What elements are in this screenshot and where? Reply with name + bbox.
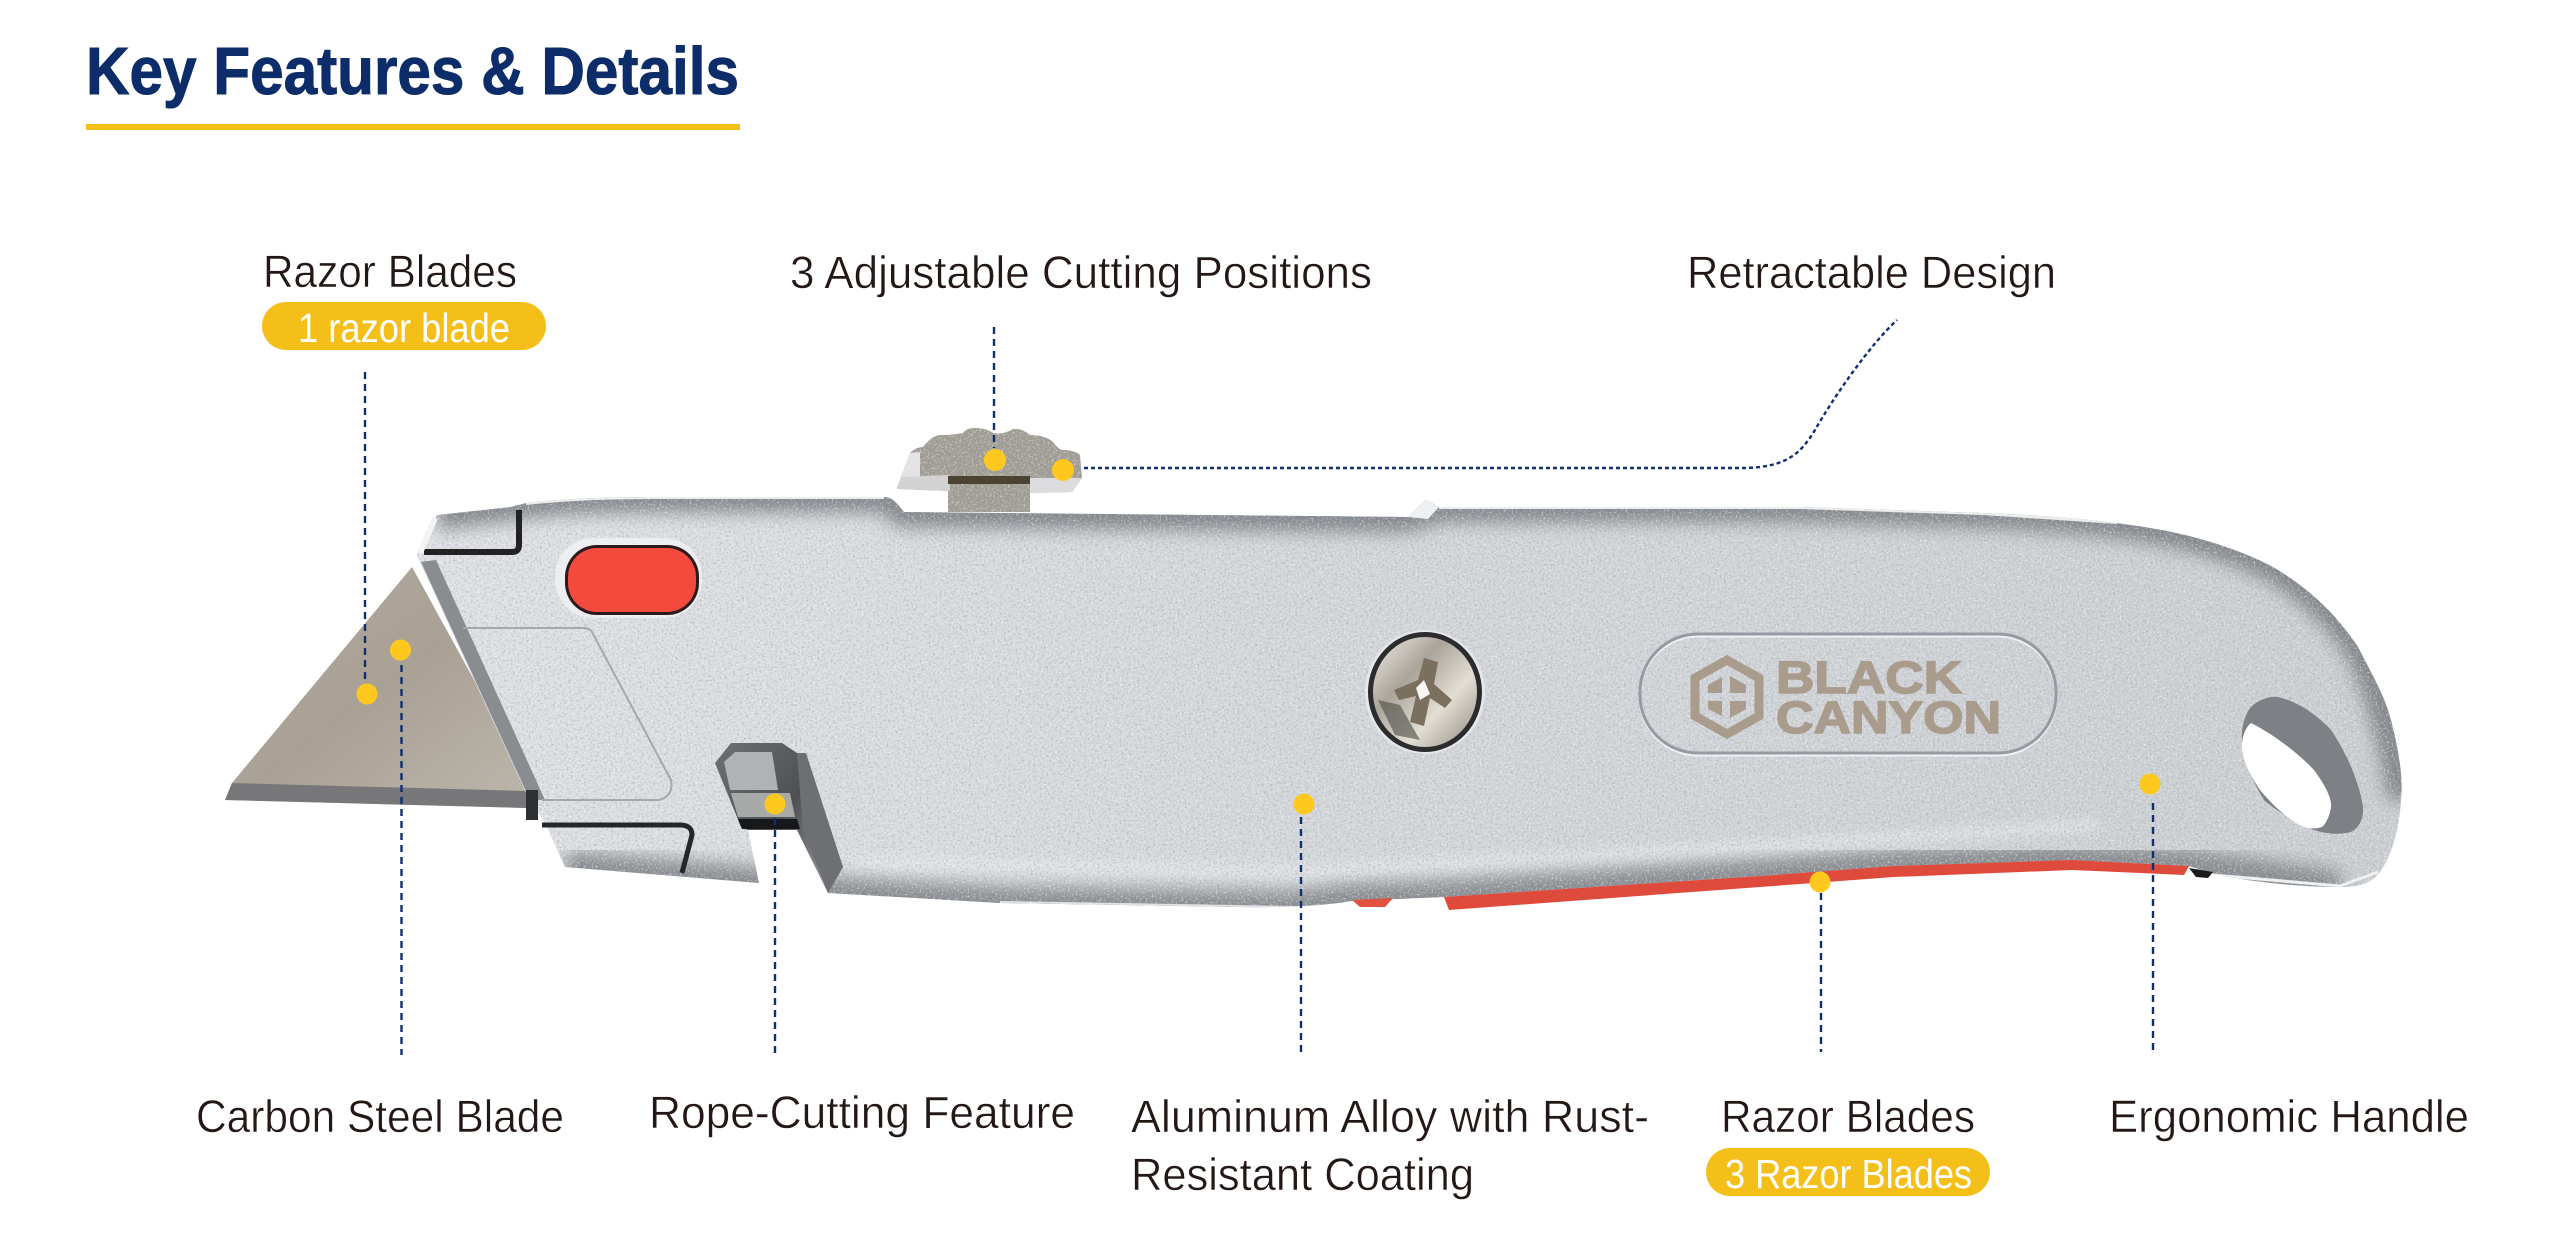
label text: Razor Blades [1721,1091,1975,1142]
label: razor blades, 1 razor blade [262,246,546,351]
knife body [400,480,2420,920]
leader lines [365,320,2153,1055]
label: aluminum alloy: Aluminum Alloy with Rust- [1131,1091,1649,1142]
utility knife illustration [225,420,2420,920]
title [86,34,740,130]
label text: Razor Blades [263,246,517,297]
yellow pill: 1 razor blade [298,305,510,351]
blade [225,567,540,808]
yellow pill: 3 Razor Blades [1725,1151,1972,1197]
slider thumb [897,428,1082,512]
label: razor blades, 3 razor blades [1706,1091,1990,1197]
cap and seam details [420,510,692,873]
label: aluminum alloy [1131,1091,1649,1200]
screw [1365,630,1485,754]
heading text: Key Features & Details [86,34,739,109]
rope-cutting notch [715,743,843,893]
label: rope-cutting feature: Rope-Cutting Feature [649,1087,1075,1138]
callout markers [356,449,2160,892]
label: ergonomic handle: Ergonomic Handle [2109,1091,2469,1142]
label: retractable design: Retractable Design [1687,247,2056,298]
logo plate [1640,634,2056,755]
logo plate: CANYON [1776,692,2001,743]
heading underline [86,124,740,130]
red lock button [555,538,702,618]
label: adjustable positions: 3 Adjustable Cutting Positions [790,247,1372,298]
lanyard hole [2242,697,2363,834]
red underside strip [1352,860,2213,910]
label: aluminum alloy: Resistant Coating [1131,1149,1474,1200]
icon: hexagon logo [1695,660,1759,734]
brand name: BLACK [1776,652,1963,703]
label: carbon steel blade: Carbon Steel Blade [196,1091,564,1142]
